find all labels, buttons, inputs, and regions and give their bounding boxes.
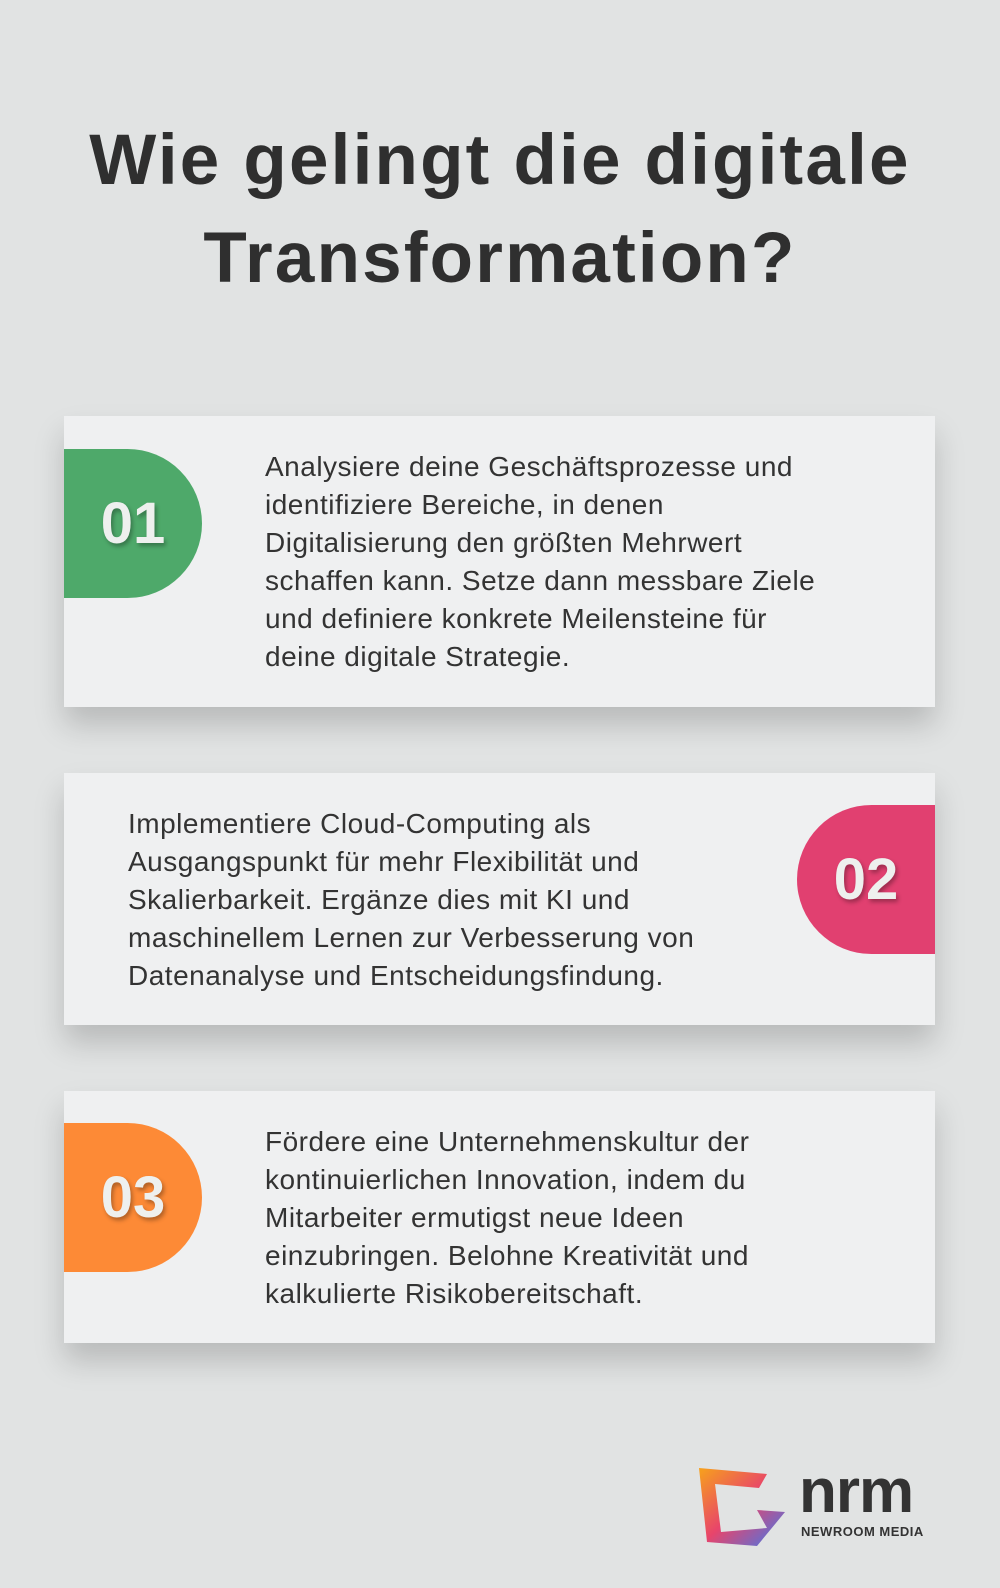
text step 1: deine digitale Strategie. bbox=[265, 641, 570, 672]
text step 2: Implementiere Cloud-Computing als bbox=[128, 808, 591, 839]
text step 2: maschinellem Lernen zur Verbesserung von bbox=[128, 922, 694, 953]
text step 1: und definiere konkrete Meilensteine für bbox=[265, 603, 767, 634]
text step 3: Mitarbeiter ermutigst neue Ideen bbox=[265, 1202, 684, 1233]
text step 2 bbox=[128, 808, 694, 991]
brand name: nrm bbox=[799, 1457, 913, 1526]
text step 2: Skalierbarkeit. Ergänze dies mit KI und bbox=[128, 884, 630, 915]
panel: step 1 bbox=[64, 416, 935, 707]
text step 3: kalkulierte Risikobereitschaft. bbox=[265, 1278, 643, 1309]
text step 1: identifiziere Bereiche, in denen bbox=[265, 489, 664, 520]
panel: step 3 bbox=[64, 1091, 935, 1343]
title bbox=[89, 121, 911, 298]
text step 1 bbox=[265, 451, 815, 672]
panel: step 2 bbox=[64, 773, 935, 1025]
badge 03: 03 bbox=[101, 1165, 165, 1230]
text step 3: einzubringen. Belohne Kreativität und bbox=[265, 1240, 749, 1271]
badge 02: 02 bbox=[834, 847, 898, 912]
text step 1: Digitalisierung den größten Mehrwert bbox=[265, 527, 742, 558]
logo bbox=[699, 1457, 924, 1546]
text step 1: Analysiere deine Geschäftsprozesse und bbox=[265, 451, 793, 482]
text step 2: Ausgangspunkt für mehr Flexibilität und bbox=[128, 846, 639, 877]
badge 01: 01 bbox=[101, 491, 165, 556]
logo: NEWROOM MEDIA bbox=[801, 1524, 924, 1539]
badge 02 bbox=[797, 805, 935, 954]
text step 2: Datenanalyse und Entscheidungsfindung. bbox=[128, 960, 664, 991]
text step 3: kontinuierlichen Innovation, indem du bbox=[265, 1164, 746, 1195]
text step 3: Fördere eine Unternehmenskultur der bbox=[265, 1126, 749, 1157]
text step 3 bbox=[265, 1126, 749, 1309]
badge 03 bbox=[64, 1123, 202, 1272]
title: Transformation? bbox=[203, 219, 797, 298]
icon: logo mark bbox=[699, 1468, 785, 1546]
title: Wie gelingt die digitale bbox=[89, 121, 911, 200]
badge 01 bbox=[64, 449, 202, 598]
text step 1: schaffen kann. Setze dann messbare Ziele bbox=[265, 565, 815, 596]
